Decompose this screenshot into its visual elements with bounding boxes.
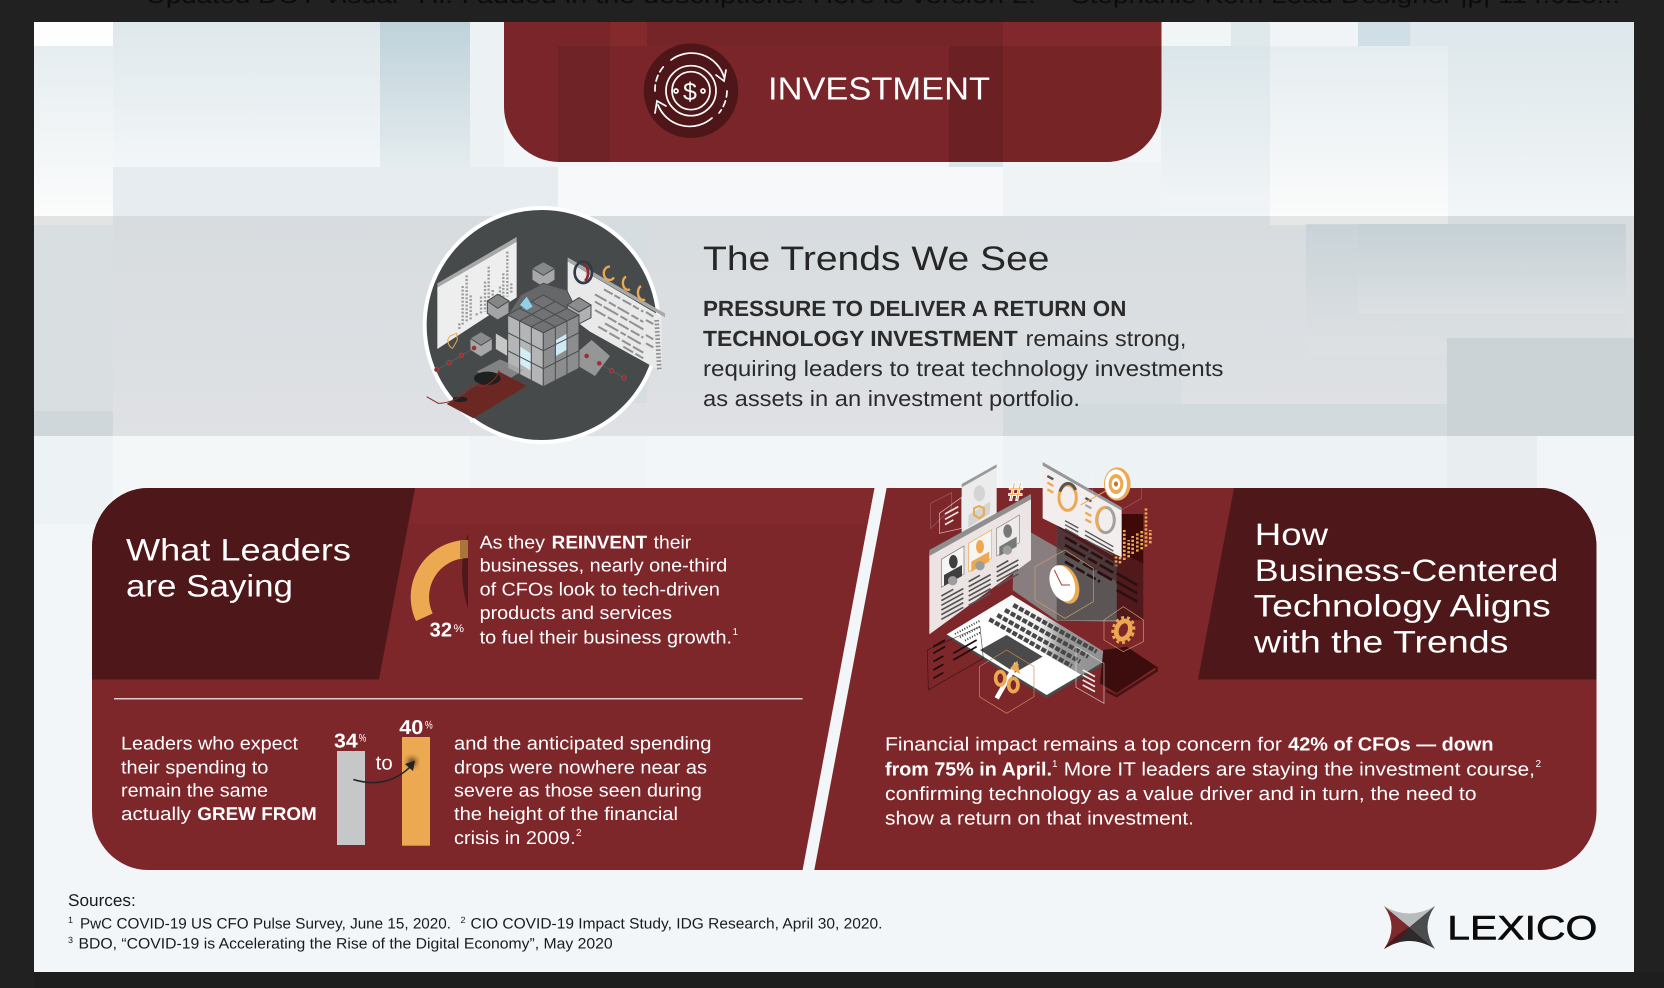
- bar chart: 34 to 40 percent: [334, 717, 433, 846]
- text: reinvent statement: As they: [480, 531, 546, 552]
- text: leaders who expect: [121, 732, 317, 824]
- text: anticipated spending: drops were nowhere near as: [454, 756, 707, 777]
- trends body text: TECHNOLOGY INVESTMENT: [703, 326, 1018, 351]
- bar chart: 34 to 40 percent: to: [376, 752, 393, 774]
- text: financial impact: 1: [1052, 759, 1058, 770]
- text: anticipated spending: 2: [576, 828, 582, 839]
- panel heading block: Technology Aligns: [1254, 588, 1551, 624]
- left data wall: [437, 237, 517, 349]
- sources: 1: [68, 915, 73, 925]
- gauge: 32 percent: 32: [430, 620, 452, 642]
- text: anticipated spending: severe as those seen during: [454, 780, 702, 801]
- text: financial impact: from 75% in April.: [885, 760, 1052, 780]
- floating outline cards: [927, 493, 1104, 703]
- trends body text: as assets in an investment portfolio.: [703, 386, 1080, 411]
- arrow: growth: [353, 758, 416, 783]
- red data points: [434, 346, 626, 380]
- panel: how business-centered technology aligns: [814, 488, 1596, 870]
- right report wall: [568, 257, 665, 372]
- sources: Sources:: [68, 891, 136, 910]
- cropped window caption: [146, 0, 1620, 8]
- hash symbol: #: [1008, 477, 1023, 506]
- sources: CIO COVID-19 Impact Study, IDG Research, April 30, 2020.: [470, 915, 882, 932]
- text: financial impact: Financial impact remains a top concern for: [885, 734, 1283, 755]
- icon: rotating dollar coin: [644, 43, 738, 138]
- banner title: INVESTMENT: [768, 70, 990, 106]
- text: reinvent statement: to fuel their business growth.: [480, 626, 732, 647]
- bar chart: 34 to 40 percent: 34: [334, 730, 359, 752]
- text: financial impact: 42% of CFOs — down: [1288, 734, 1494, 755]
- data cube: [470, 262, 610, 387]
- panel heading block: with the Trends: [1253, 624, 1508, 660]
- trends body text: requiring leaders to treat technology investments: [703, 356, 1224, 381]
- illustration: data cube in circle: [425, 208, 665, 442]
- text: reinvent statement: their: [654, 531, 691, 552]
- text: financial impact: confirming technology as a value driver and in turn, the need to: [885, 784, 1477, 805]
- text: anticipated spending: [454, 732, 711, 848]
- panel: what leaders are saying: [92, 488, 874, 870]
- text: leaders who expect: Leaders who expect: [121, 732, 298, 753]
- bar chart: 34 to 40 percent: %: [359, 733, 366, 745]
- sources: 3: [68, 935, 73, 945]
- sources: 2: [460, 915, 466, 925]
- icon: clock: [1035, 550, 1093, 618]
- text: reinvent statement: [480, 531, 738, 647]
- text: financial impact: show a return on that investment.: [885, 808, 1194, 830]
- text: financial impact: More IT leaders are staying the investment course,: [1064, 760, 1535, 780]
- logo: Lexico: LEXICO: [1447, 909, 1597, 947]
- charts card: [1043, 462, 1122, 557]
- front profiles card: [929, 494, 1031, 634]
- trends body text: remains strong,: [1026, 326, 1186, 351]
- red floor carpet and wave: [427, 370, 527, 423]
- icon: gear: [1104, 607, 1143, 652]
- gray trends band: [34, 216, 1634, 436]
- text: reinvent statement: businesses, nearly one-third: [480, 555, 727, 576]
- text: anticipated spending: and the anticipated spending: [454, 732, 711, 753]
- header banner: [504, 22, 1162, 162]
- icon: target: [1081, 455, 1142, 513]
- text: leaders who expect: actually: [121, 803, 192, 824]
- icon: rotating dollar coin: $: [683, 78, 697, 106]
- text: financial impact: 2: [1536, 759, 1542, 770]
- trends body text: [703, 296, 1224, 411]
- text: reinvent statement: REINVENT: [552, 531, 648, 552]
- sources: BDO, “COVID-19 is Accelerating the Rise of the Digital Economy”, May 2020: [78, 935, 613, 952]
- icon: percent: [979, 650, 1034, 713]
- text: reinvent statement: of CFOs look to tech-driven: [480, 578, 720, 600]
- laptop: [947, 523, 1157, 698]
- back profile card: [962, 464, 997, 537]
- panel heading block: are Saying: [126, 568, 293, 604]
- logo: Lexico: [1384, 906, 1597, 949]
- text: leaders who expect: their spending to: [121, 756, 268, 777]
- panel heading block: [92, 488, 415, 680]
- bar chart: 34 to 40 percent: 40: [399, 717, 423, 739]
- back dark dashboard: [1057, 507, 1150, 620]
- text: anticipated spending: crisis in 2009.: [454, 827, 576, 848]
- panel heading block: What Leaders: [126, 532, 351, 568]
- gauge: 32 percent: [411, 533, 468, 642]
- trends body text: PRESSURE TO DELIVER A RETURN ON: [703, 296, 1126, 321]
- gauge: 32 percent: %: [454, 623, 464, 635]
- sources: PwC COVID-19 US CFO Pulse Survey, June 15, 2020.: [80, 915, 451, 932]
- panel heading block: How: [1255, 517, 1329, 552]
- text: leaders who expect: GREW FROM: [197, 803, 317, 824]
- trends heading: The Trends We See: [703, 240, 1050, 278]
- bar chart: 34 to 40 percent: %: [425, 719, 433, 731]
- text: anticipated spending: the height of the financial: [454, 803, 678, 824]
- icon: four-point star: [1384, 906, 1435, 949]
- panel heading block: Business-Centered: [1255, 553, 1558, 588]
- illustration: laptop with floating dashboards: [927, 455, 1157, 713]
- text: reinvent statement: 1: [732, 627, 738, 638]
- panel heading block: [1198, 488, 1596, 680]
- text: reinvent statement: products and services: [480, 602, 672, 623]
- sources: [68, 891, 882, 952]
- text: leaders who expect: remain the same: [121, 780, 268, 801]
- text: financial impact: [885, 734, 1542, 830]
